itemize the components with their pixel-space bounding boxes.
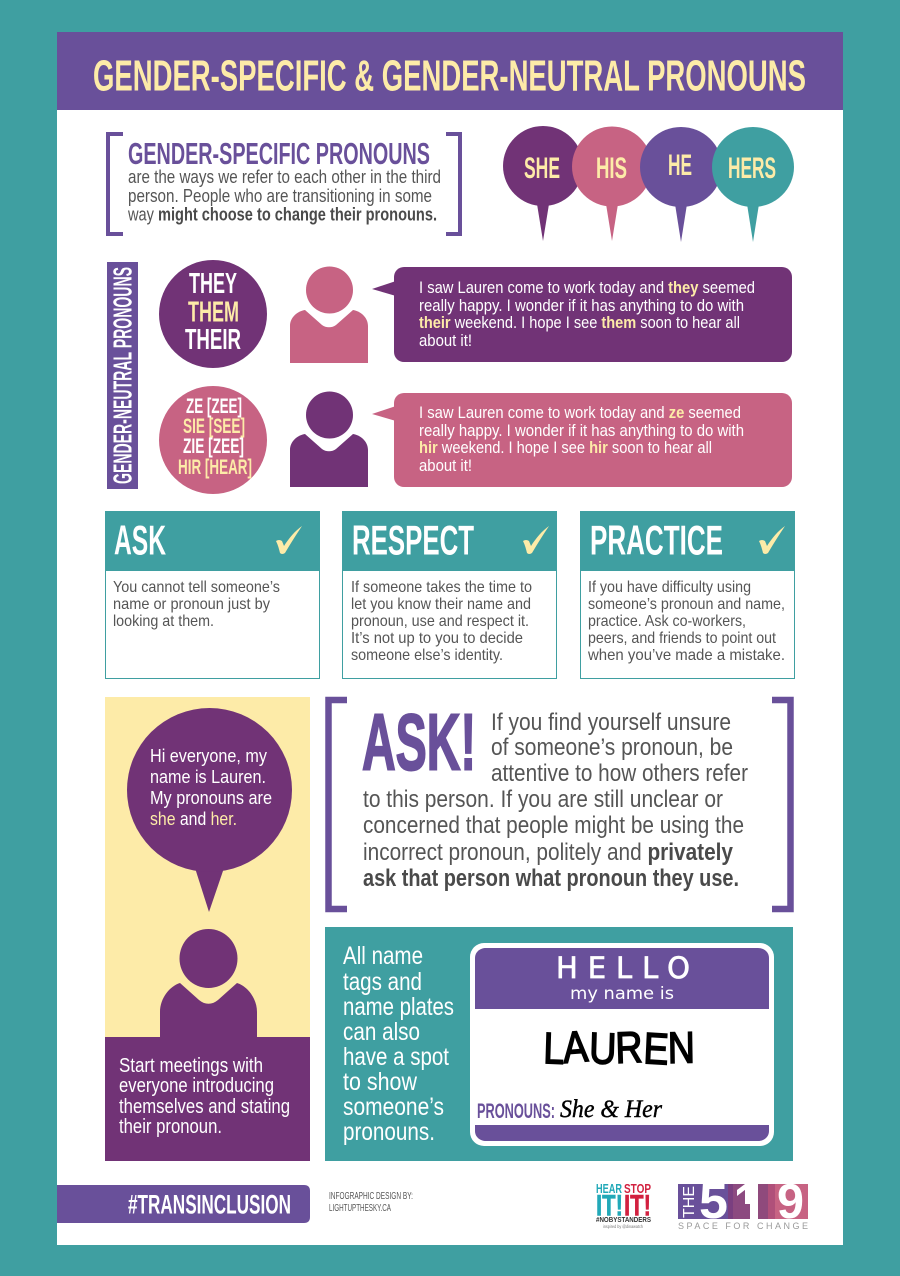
panel: respect card: someone else’s identity.	[351, 647, 503, 664]
text: name tags note: All name	[343, 942, 423, 970]
panel: respect card: let you know their name and	[351, 596, 531, 613]
logo: hear it stop it: IT!	[624, 1190, 651, 1222]
caption: start meetings: Start meetings with	[119, 1055, 263, 1077]
text: name tags note: someone’s	[343, 1093, 444, 1121]
name tag illustration: LAUREN	[543, 1022, 695, 1074]
hashtag banner: #TRANSINCLUSION	[128, 1190, 291, 1220]
caption: start meetings: themselves and stating	[119, 1096, 290, 1118]
panel: ask card: looking at them.	[113, 613, 214, 630]
panel: name tags	[325, 927, 793, 1161]
speech balloons: she his he hers: SHE	[524, 152, 560, 185]
panel: gender-specific definition	[108, 134, 460, 234]
text: name tags note: can also	[343, 1018, 420, 1046]
logo: hear it stop it: HEAR	[596, 1181, 622, 1196]
logo: hear it stop it: inspired by @dinawatch	[603, 1224, 643, 1229]
circle: ze sie zie hir: HIR [HEAR]	[178, 456, 252, 479]
panel: ask callout: ASK!	[362, 698, 476, 786]
logo: the 519: SPACE FOR CHANGE	[678, 1221, 808, 1231]
hashtag banner	[57, 1185, 310, 1223]
panel: ask card: name or pronoun just by	[113, 596, 270, 613]
speech bubble: they example: really happy. I wonder if it has anything to do with	[419, 296, 744, 315]
panel: ask callout: of someone’s pronoun, be	[491, 734, 733, 761]
caption: start meetings: their pronoun.	[119, 1116, 222, 1138]
panel: meeting introductions	[105, 697, 310, 1161]
speech bubble: ze example	[372, 393, 792, 487]
speech bubble: they example: their weekend. I hope I see them soon to hear all	[419, 313, 740, 332]
speech bubble: introduction: My pronouns are	[150, 787, 272, 808]
speech balloons: she his he hers: HE	[668, 149, 692, 182]
panel: ask callout: attentive to how others refer	[491, 760, 748, 787]
text: name tags note: to show	[343, 1068, 418, 1096]
panel: ask callout: to this person. If you are still unclear or	[363, 786, 723, 813]
panel: practice card: PRACTICE	[590, 516, 723, 564]
vertical label: gender-neutral pronouns	[107, 262, 138, 489]
speech bubble: they example: about it!	[419, 331, 472, 350]
panel: ask callout: concerned that people might be using the	[363, 812, 744, 839]
panel: ask card	[105, 511, 320, 678]
logo: hear it stop it: #NOBYSTANDERS	[596, 1217, 651, 1224]
design credit	[329, 1191, 413, 1214]
panel: ask callout: incorrect pronoun, politely and privately	[363, 839, 734, 866]
panel: ask callout: If you find yourself unsure	[491, 709, 731, 736]
icon: pink person	[290, 266, 368, 363]
speech bubble: ze example: I saw Lauren come to work today and ze seemed	[419, 403, 741, 422]
speech bubble: introduction: she and her.	[150, 808, 237, 829]
panel: practice card: when you’ve made a mistake.	[587, 647, 785, 664]
panel: gender-specific definition: way might choose to change their pronouns.	[127, 204, 437, 224]
name tag illustration: my name is	[570, 984, 674, 1004]
name tag illustration: She & Her	[560, 1096, 662, 1123]
speech bubble: introduction: name is Lauren.	[150, 766, 266, 787]
panel: respect card: If someone takes the time to	[351, 579, 532, 596]
icon: speaking person	[160, 929, 257, 1038]
panel: practice card: peers, and friends to point out	[588, 630, 776, 647]
logo: the 519: 5	[699, 1175, 728, 1229]
panel: ask card: You cannot tell someone’s	[113, 579, 280, 596]
caption: start meetings: everyone introducing	[119, 1075, 274, 1097]
logo: hear it stop it: IT!	[596, 1190, 623, 1222]
circle: ze sie zie hir: ZE [ZEE]	[186, 395, 242, 418]
design credit: LIGHTUPTHESKY.CA	[329, 1203, 391, 1214]
panel: respect card: pronoun, use and respect it.	[351, 613, 529, 630]
speech bubble: they example	[372, 267, 792, 362]
text: name tags note: tags and	[343, 968, 422, 996]
speech bubble: ze example: really happy. I wonder if it has anything to do with	[419, 421, 744, 440]
speech bubble: they example: I saw Lauren come to work today and they seemed	[419, 278, 755, 297]
speech bubble: introduction	[127, 708, 292, 912]
text: name tags note: pronouns.	[343, 1118, 435, 1146]
text: name tags note	[343, 942, 454, 1146]
text: name tags note: name plates	[343, 993, 454, 1021]
logo: hear it stop it: STOP	[624, 1181, 651, 1196]
logo: the 519	[678, 1175, 808, 1231]
circle: they them their: THEM	[188, 296, 239, 328]
panel: practice card: someone’s pronoun and name,	[588, 596, 785, 613]
circle: they them their: THEY	[189, 268, 237, 300]
panel: respect card: It’s not up to you to decide	[351, 630, 523, 647]
logo: the 519: THE	[681, 1186, 698, 1218]
speech balloons: she his he hers: HERS	[728, 152, 776, 185]
circle: they them their: THEIR	[185, 324, 241, 356]
circle: ze sie zie hir: SIE [SEE]	[183, 415, 245, 438]
speech bubble: ze example: about it!	[419, 456, 472, 475]
name tag illustration	[470, 943, 774, 1146]
panel: practice card: practice. Ask co-workers,	[588, 613, 746, 630]
panel: practice card: If you have difficulty using	[588, 579, 751, 596]
name tag illustration: PRONOUNS:	[477, 1100, 555, 1123]
vertical label: gender-neutral pronouns: GENDER-NEUTRAL PRONOUNS	[108, 267, 138, 484]
speech bubble: ze example: hir weekend. I hope I see hir soon to hear all	[419, 438, 712, 457]
circle: they them their	[159, 260, 267, 368]
logo: hear it stop it	[596, 1181, 651, 1229]
logo: the 519: 9	[777, 1175, 804, 1229]
panel: respect card: RESPECT	[352, 516, 474, 564]
design credit: INFOGRAPHIC DESIGN BY:	[329, 1191, 413, 1202]
panel: ask card: ASK	[114, 516, 166, 564]
panel: ask callout	[328, 698, 790, 909]
circle: ze sie zie hir	[159, 386, 267, 494]
panel: gender-specific definition: are the ways we refer to each other in the third	[128, 167, 441, 187]
panel: ask callout: ask that person what pronoun they use.	[363, 865, 739, 892]
panel: practice card	[580, 511, 795, 678]
speech bubble: introduction: Hi everyone, my	[150, 745, 268, 766]
circle: ze sie zie hir: ZIE [ZEE]	[183, 435, 244, 458]
text: name tags note: have a spot	[343, 1043, 449, 1071]
speech balloons: she his he hers	[503, 126, 794, 242]
title banner	[57, 32, 843, 110]
panel: gender-specific definition: GENDER-SPECIFIC PRONOUNS	[128, 136, 430, 171]
panel: gender-specific definition: person. People who are transitioning in some	[128, 186, 432, 206]
name tag illustration: HELLO	[556, 951, 690, 985]
caption: start meetings	[119, 1055, 290, 1138]
speech balloons: she his he hers: HIS	[596, 152, 627, 185]
icon: plum person	[290, 392, 368, 487]
panel: respect card	[342, 511, 557, 678]
